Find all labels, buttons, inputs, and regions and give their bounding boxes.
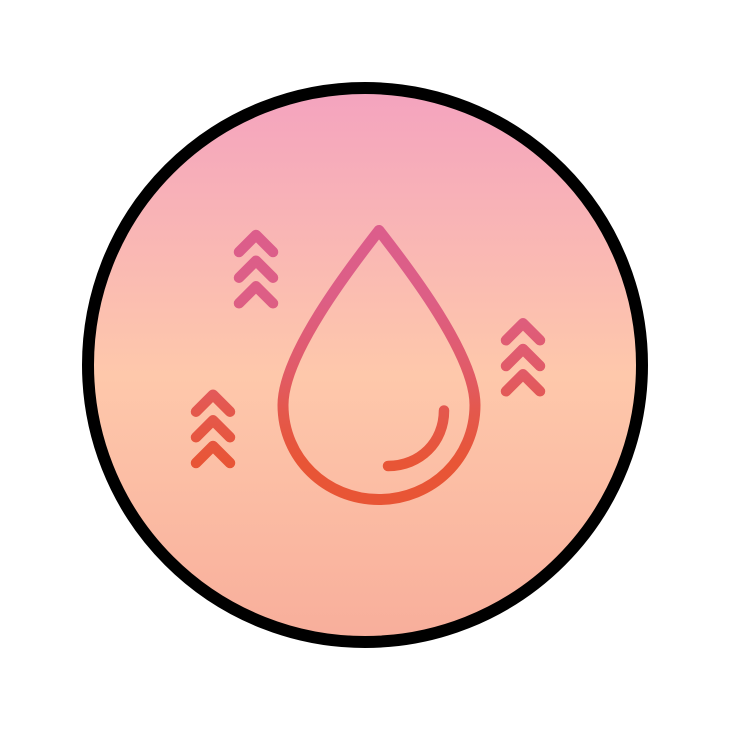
drop highlight — [388, 410, 444, 466]
chevrons: top left — [239, 235, 273, 303]
drop outline — [283, 230, 475, 500]
chevrons: right — [506, 323, 540, 391]
background circle — [88, 88, 642, 642]
chevrons: bottom left — [196, 395, 230, 463]
